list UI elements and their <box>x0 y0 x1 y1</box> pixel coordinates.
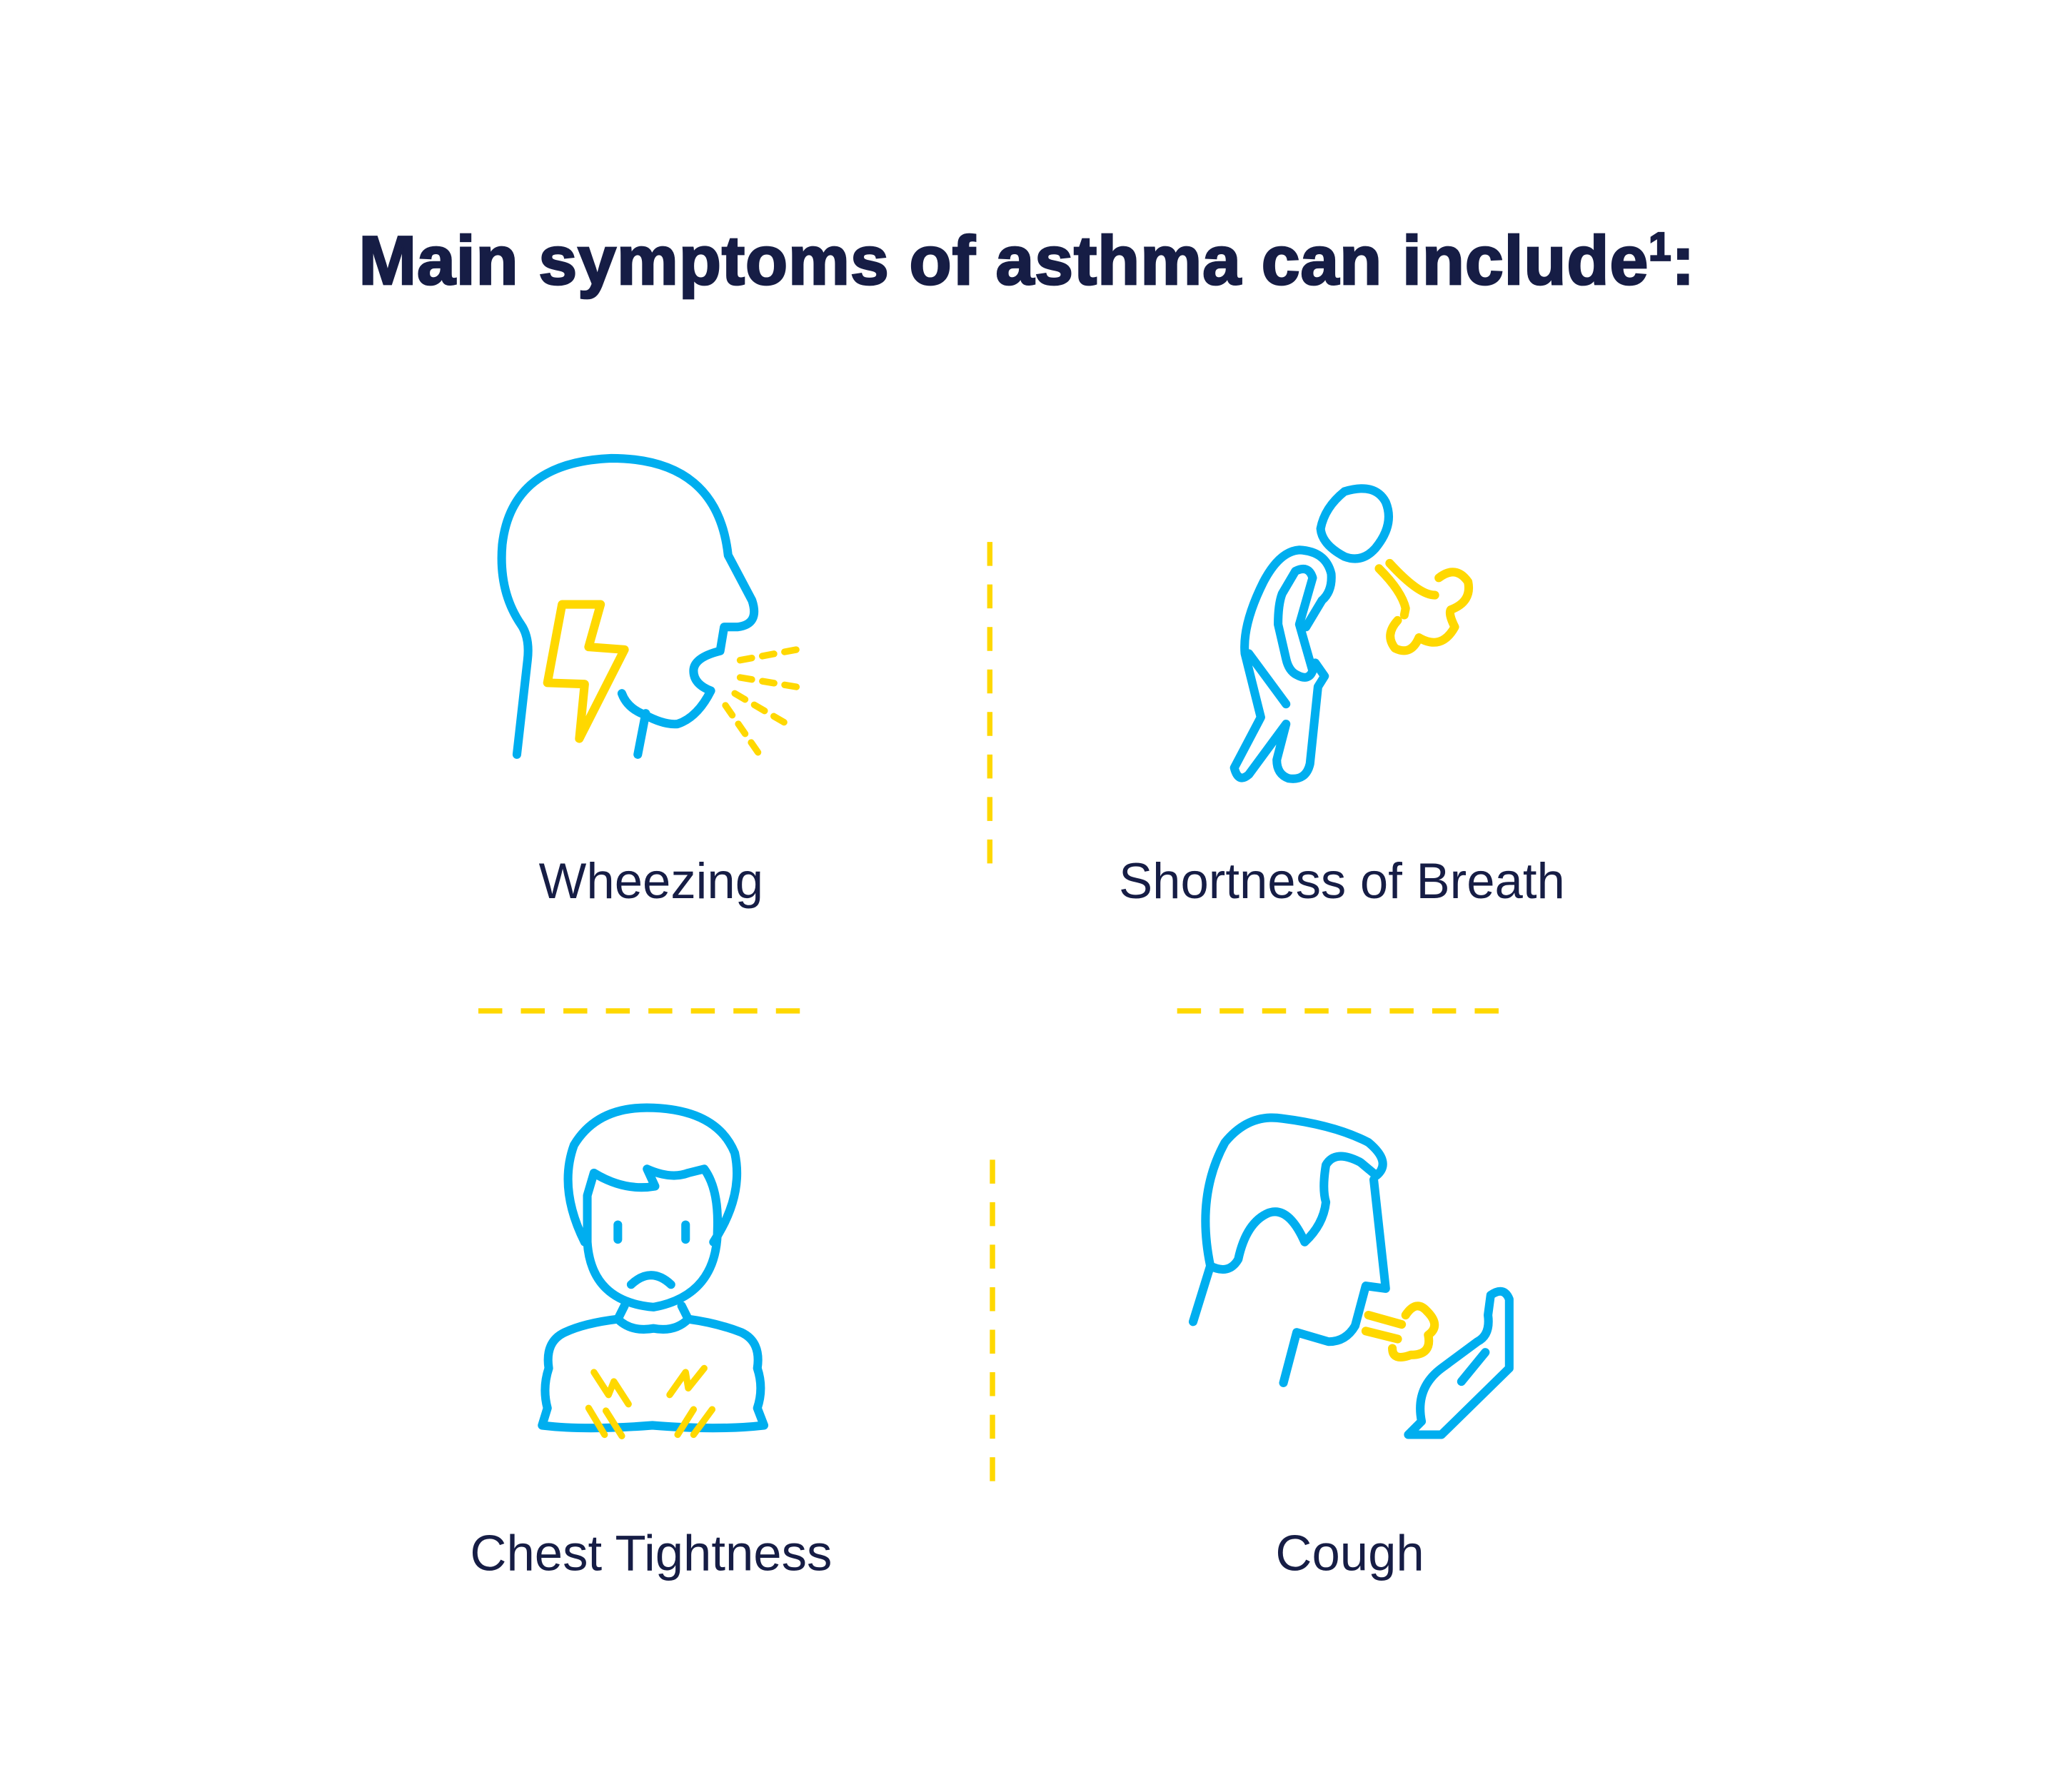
icon: bent person <box>1234 488 1469 779</box>
label: shortness of breath: Shortness of Breath <box>1119 852 1565 909</box>
icon: coughing person <box>1193 1118 1509 1434</box>
title: 1 <box>1649 224 1671 269</box>
label: cough: Cough <box>1275 1524 1424 1581</box>
panel: cough <box>1193 1118 1509 1581</box>
panel: chest tightness <box>470 1108 832 1581</box>
panel: shortness of breath <box>1119 488 1565 909</box>
icon: head wheezing <box>502 458 804 757</box>
label: chest tightness: Chest Tightness <box>470 1524 832 1581</box>
title: : <box>1671 221 1695 299</box>
title: Main symptoms of asthma can include <box>358 221 1649 299</box>
label: wheezing: Wheezing <box>539 852 763 909</box>
icon: person holding chest <box>542 1108 764 1436</box>
panel: wheezing <box>502 458 804 909</box>
